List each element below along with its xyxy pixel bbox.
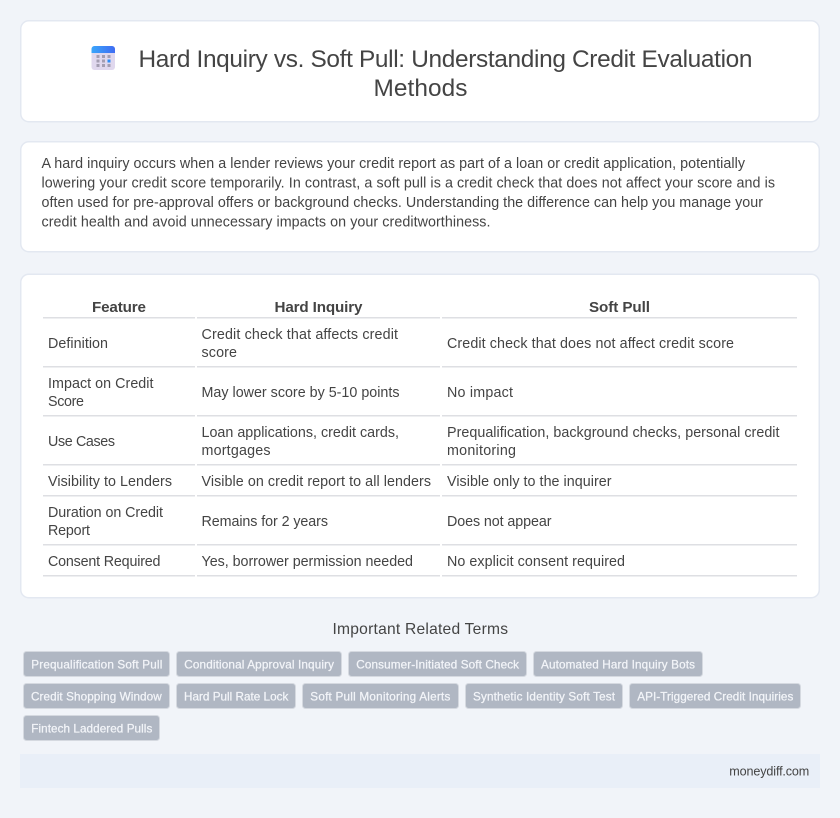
tag xyxy=(176,652,342,676)
tag: Credit Shopping Window xyxy=(31,690,162,703)
tag xyxy=(24,684,170,708)
table row: impact on credit score: Score xyxy=(48,394,84,410)
table row: definition: Credit check that affects credit xyxy=(202,327,398,343)
tag: Hard Pull Rate Lock xyxy=(184,690,288,703)
heading: important related terms: Important Related Terms xyxy=(332,621,508,638)
table row: visibility to lenders: Visibility to Lenders xyxy=(48,474,172,490)
tag xyxy=(630,684,800,708)
table row: use cases: Use Cases xyxy=(48,434,115,450)
tag: Synthetic Identity Soft Test xyxy=(473,690,616,703)
tag: Prequalification Soft Pull xyxy=(31,658,162,671)
footer: site name: moneydiff.com xyxy=(729,764,809,778)
table row: impact on credit score xyxy=(43,376,797,416)
panel: comparison table xyxy=(21,274,819,598)
table row: duration on credit report: Does not appear xyxy=(447,514,552,530)
table row: duration on credit report xyxy=(43,505,797,546)
text block: introduction: A hard inquiry occurs when a lender reviews your credit report as part of a loan or credit application, potentially xyxy=(42,156,746,172)
tag xyxy=(534,652,702,676)
text block: introduction: often used for pre-approval offers or background checks. Understanding the difference can help you manage your xyxy=(42,195,763,211)
table row: impact on credit score: No impact xyxy=(447,385,513,401)
table row: definition xyxy=(43,327,797,368)
panel: introduction paragraph xyxy=(21,142,819,252)
panel: title header xyxy=(21,21,819,122)
icon: calendar xyxy=(92,46,115,70)
tag: Soft Pull Monitoring Alerts xyxy=(310,690,450,703)
table row: definition: score xyxy=(202,345,237,361)
table row: use cases: monitoring xyxy=(447,443,516,459)
table row: consent required: Consent Required xyxy=(48,554,161,570)
tag: API-Triggered Credit Inquiries xyxy=(637,690,793,703)
table row: duration on credit report: Remains for 2 years xyxy=(202,514,328,530)
text block: introduction xyxy=(42,156,775,230)
table row: definition: Definition xyxy=(48,336,108,352)
tag xyxy=(24,716,160,740)
tag xyxy=(348,652,526,676)
table row: use cases xyxy=(43,425,797,466)
tag: Consumer-Initiated Soft Check xyxy=(356,658,519,671)
footer xyxy=(20,754,820,788)
table header row xyxy=(43,299,797,318)
table row: use cases: Prequalification, background checks, personal credit xyxy=(447,425,780,441)
text block: introduction: lowering your credit score temporarily. In contrast, a soft pull is a credit check that does not affect your score and is xyxy=(42,176,775,192)
table row: visibility to lenders xyxy=(43,474,797,496)
tag xyxy=(466,684,622,708)
table row: visibility to lenders: Visible on credit report to all lenders xyxy=(202,474,431,490)
table header row: Soft Pull xyxy=(589,299,650,316)
table row: impact on credit score: May lower score by 5-10 points xyxy=(202,385,400,401)
panel: related term tags xyxy=(24,652,800,740)
tag: Automated Hard Inquiry Bots xyxy=(541,658,695,671)
table row: use cases: Loan applications, credit cards, xyxy=(202,425,399,441)
table row: duration on credit report: Duration on Credit xyxy=(48,505,163,521)
table row: visibility to lenders: Visible only to the inquirer xyxy=(447,474,612,490)
text block: introduction: credit health and avoid unnecessary impacts on your creditworthiness. xyxy=(42,214,490,230)
table row: consent required xyxy=(43,554,797,576)
table row: definition: Credit check that does not affect credit score xyxy=(447,336,734,352)
table row: use cases: mortgages xyxy=(202,443,270,459)
table row: consent required: Yes, borrower permission needed xyxy=(202,554,413,570)
table row: impact on credit score: Impact on Credit xyxy=(48,376,154,392)
table header row: Hard Inquiry xyxy=(274,299,363,316)
tag xyxy=(302,684,458,708)
table header row: Feature xyxy=(92,299,146,316)
tag: Fintech Laddered Pulls xyxy=(31,722,152,735)
title xyxy=(138,46,752,102)
tag xyxy=(176,684,296,708)
title: Hard Inquiry vs. Soft Pull: Understanding Credit Evaluation xyxy=(138,46,752,73)
tag: Conditional Approval Inquiry xyxy=(184,658,334,671)
title: Methods xyxy=(374,75,468,102)
tag xyxy=(24,652,170,676)
table row: duration on credit report: Report xyxy=(48,523,90,539)
table row: consent required: No explicit consent required xyxy=(447,554,625,570)
